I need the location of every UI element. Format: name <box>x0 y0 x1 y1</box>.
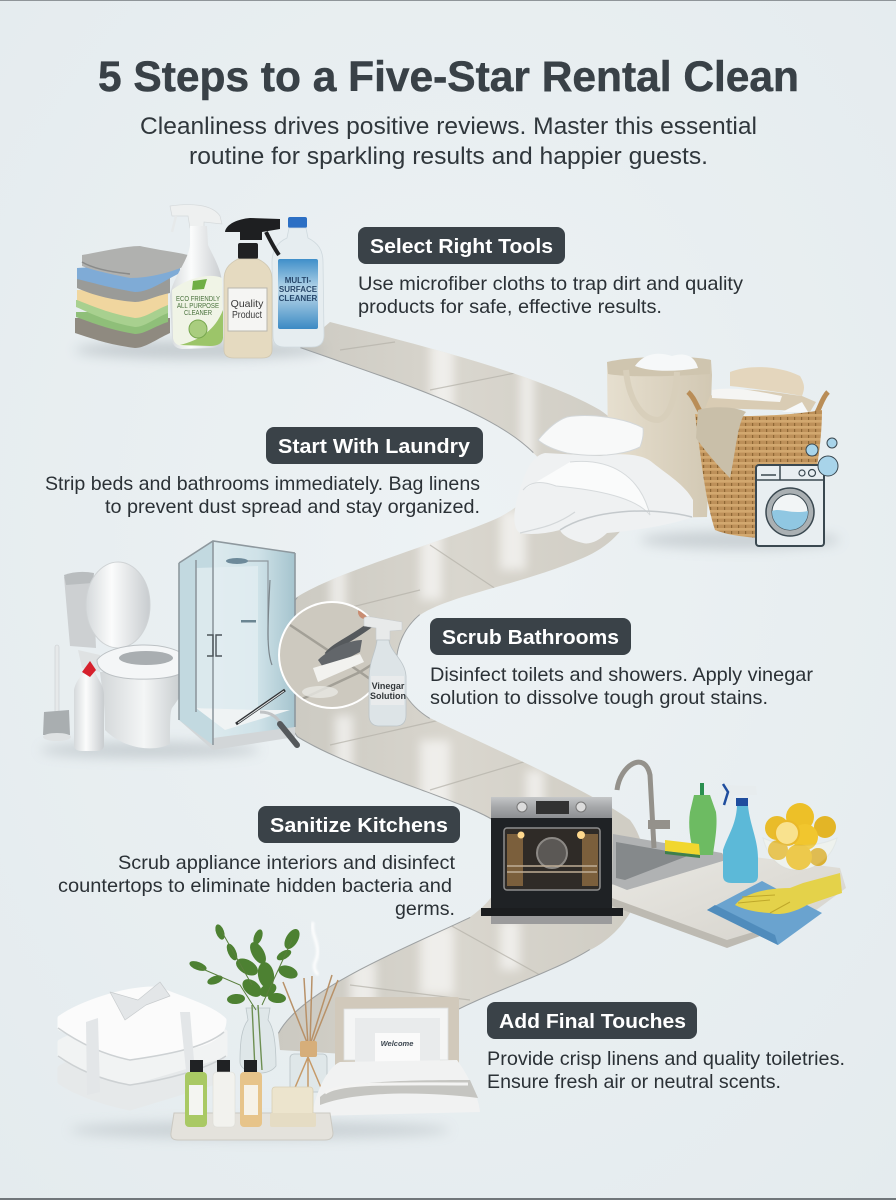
text: step 1 description <box>358 273 743 318</box>
step 5 label <box>487 1002 845 1093</box>
icon: wicker basket <box>688 367 828 538</box>
icon: toilet <box>64 562 190 748</box>
text: step 4 description: germs. <box>395 898 455 920</box>
icon: reed diffuser <box>283 922 338 1092</box>
text: step 3 description <box>430 664 814 709</box>
badge: add final touches <box>487 1002 697 1039</box>
illustration: step 3 bathroom <box>40 541 406 758</box>
icon: toilet cleaner bottle <box>74 661 104 751</box>
icon: dish soap and sponge <box>665 783 717 858</box>
text: step 4 description <box>58 852 456 920</box>
icon: stacked white towels with ribbon <box>58 982 226 1108</box>
subtitle <box>140 113 757 170</box>
icon: microfiber cloth stack <box>75 246 188 348</box>
text: step 4 description: Scrub appliance interiors and disinfect <box>118 852 456 874</box>
icon: eco spray bottle: CLEANER <box>184 308 212 317</box>
icon: bowl of lemons <box>763 803 837 870</box>
icon: bed with welcome card: Welcome <box>381 1039 413 1048</box>
subtitle: routine for sparkling results and happier guests. <box>189 143 708 170</box>
text: step 1 description: products for safe, effective results. <box>358 296 662 318</box>
icon: green plant in glass vase <box>188 923 303 1073</box>
step 3 label <box>430 618 814 709</box>
text: step 2 description: to prevent dust spread and stay organized. <box>105 496 480 518</box>
text: step 4 description: countertops to eliminate hidden bacteria and <box>58 875 452 897</box>
badge: sanitize kitchens <box>258 806 460 843</box>
icon: vinegar solution spray bottle: Vinegar <box>372 681 405 691</box>
text: step 2 description <box>45 473 480 518</box>
badge: scrub bathrooms: Scrub Bathrooms <box>442 626 619 649</box>
folded towels on top <box>705 367 816 412</box>
icon: vinegar solution spray bottle: Solution <box>370 691 406 701</box>
icon: clear multi-surface bottle: MULTI- <box>285 276 312 285</box>
winding marble path <box>277 322 644 1060</box>
title: 5 Steps to a Five-Star Rental Clean <box>98 54 799 101</box>
badge: start with laundry <box>266 427 483 464</box>
step 2 label <box>45 427 483 518</box>
icon: washing machine with bubbles <box>756 438 838 546</box>
icon: canvas laundry bag <box>607 354 712 518</box>
illustration: step 4 kitchen <box>481 762 846 948</box>
icon: squeegee <box>236 690 297 745</box>
text: step 5 description: Ensure fresh air or neutral scents. <box>487 1071 781 1093</box>
draped cloth <box>696 407 746 478</box>
icon: blue cloth and yellow glove <box>707 873 842 945</box>
badge: add final touches: Add Final Touches <box>499 1010 686 1033</box>
icon: oven <box>481 797 623 924</box>
text: step 3 description: solution to dissolve tough grout stains. <box>430 687 768 709</box>
text: step 5 description <box>487 1048 845 1093</box>
subtitle: Cleanliness drives positive reviews. Master this essential <box>140 113 757 140</box>
icon: blue spray bottle <box>722 784 758 883</box>
badge: select right tools: Select Right Tools <box>370 235 553 258</box>
icon: bed with welcome card <box>313 997 480 1116</box>
icon: quality product glass spray bottle: Product <box>232 309 262 321</box>
badge: sanitize kitchens: Sanitize Kitchens <box>270 814 448 837</box>
icon: toilet brush <box>43 645 71 741</box>
badge: select right tools <box>358 227 565 264</box>
step 1 label <box>358 227 743 318</box>
text: step 2 description: Strip beds and bathrooms immediately. Bag linens <box>45 473 480 495</box>
step 4 label <box>58 806 460 920</box>
icon: clear multi-surface bottle: CLEANER <box>279 294 318 303</box>
icon: white duvet and pillow <box>514 416 693 543</box>
icon: glass shower enclosure <box>179 541 295 750</box>
icon: kitchen counter and sink <box>612 762 846 948</box>
illustration: step 5 final touches <box>58 922 480 1140</box>
icon: quality product glass spray bottle <box>224 218 280 358</box>
badge: scrub bathrooms <box>430 618 631 655</box>
text: step 5 description: Provide crisp linens and quality toiletries. <box>487 1048 845 1070</box>
icon: quality product glass spray bottle: Quality <box>231 298 264 310</box>
icon: grout scrubbing magnifier <box>278 601 376 709</box>
illustration: step 2 laundry <box>514 354 840 549</box>
icon: eco spray bottle <box>170 205 223 349</box>
icon: eco spray bottle: ECO FRIENDLY <box>176 294 220 303</box>
icon: toiletries tray <box>171 1060 333 1140</box>
text: step 1 description: Use microfiber cloths to trap dirt and quality <box>358 273 743 295</box>
text: step 3 description: Disinfect toilets and showers. Apply vinegar <box>430 664 814 686</box>
icon: clear multi-surface bottle <box>272 217 324 347</box>
icon: vinegar solution spray bottle <box>364 617 406 726</box>
badge: start with laundry: Start With Laundry <box>278 435 471 458</box>
icon: clear multi-surface bottle: SURFACE <box>279 285 318 294</box>
illustration: step 1 cleaning tools <box>75 205 325 359</box>
icon: eco spray bottle: ALL PURPOSE <box>177 301 219 310</box>
